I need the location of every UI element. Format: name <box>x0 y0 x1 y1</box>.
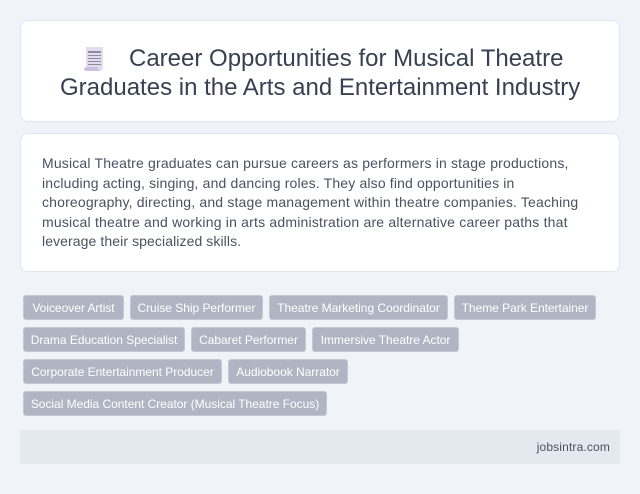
tag: Theme Park Entertainer: Theme Park Entertainer <box>462 301 588 315</box>
icon: paper scroll <box>84 47 103 71</box>
tag: Drama Education Specialist: Drama Education Specialist <box>31 333 177 347</box>
tag: Cabaret Performer <box>191 327 306 352</box>
tag: Corporate Entertainment Producer: Corporate Entertainment Producer <box>31 365 214 379</box>
title line 1: Career Opportunities for Musical Theatre <box>129 45 563 72</box>
tag: Corporate Entertainment Producer <box>23 359 222 384</box>
tag: Immersive Theatre Actor: Immersive Theatre Actor <box>321 333 450 347</box>
tag: Cruise Ship Performer: Cruise Ship Performer <box>137 301 256 315</box>
description line 3: choreography, directing, and stage management within theatre companies. Teaching <box>42 194 578 210</box>
tag: Theatre Marketing Coordinator <box>269 295 448 320</box>
description line 2: including acting, singing, and dancing roles. They also find opportunities in <box>42 175 514 191</box>
tag: Cabaret Performer: Cabaret Performer <box>199 333 298 347</box>
panel: header <box>20 20 620 122</box>
footer site name: jobsintra.com <box>537 440 610 454</box>
footer bar <box>20 430 620 464</box>
tag: Drama Education Specialist <box>23 327 185 352</box>
title line 2: Graduates in the Arts and Entertainment Industry <box>60 74 580 101</box>
tag: Cruise Ship Performer <box>130 295 263 320</box>
tag: Voiceover Artist <box>23 295 124 320</box>
tag: Audiobook Narrator <box>228 359 348 384</box>
tag: Immersive Theatre Actor <box>312 327 459 352</box>
tag: Voiceover Artist: Voiceover Artist <box>32 301 115 315</box>
tag: Audiobook Narrator: Audiobook Narrator <box>236 365 340 379</box>
description line 1: Musical Theatre graduates can pursue careers as performers in stage productions, <box>42 155 569 171</box>
description line 5: leverage their specialized skills. <box>42 233 241 249</box>
tag: Social Media Content Creator: Social Media Content Creator (Musical Theatre Focus) <box>31 397 319 411</box>
panel: description <box>20 133 620 272</box>
description line 4: musical theatre and working in arts administration are alternative career paths that <box>42 214 568 230</box>
tag: Theatre Marketing Coordinator: Theatre Marketing Coordinator <box>277 301 440 315</box>
tag: Theme Park Entertainer <box>454 295 596 320</box>
tag: Social Media Content Creator <box>23 391 327 416</box>
